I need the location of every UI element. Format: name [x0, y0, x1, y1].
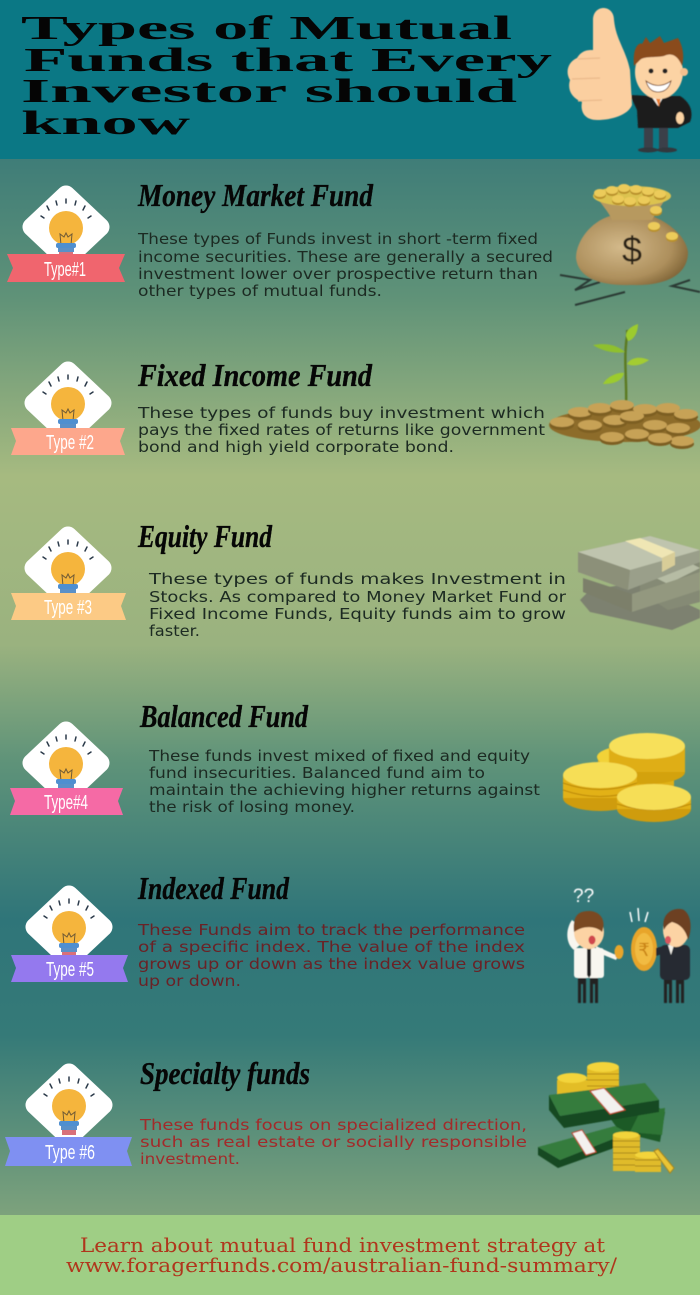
badge: Type #6 — [5, 1073, 132, 1166]
section: Fixed Income Fund — [11, 324, 700, 456]
icon: plant growing from coins — [549, 324, 700, 449]
body text: These types of Funds invest in short -term fixed — [137, 230, 538, 248]
heading: Specialty funds — [140, 1055, 310, 1091]
body text: These funds focus on specialized direction, — [139, 1116, 527, 1134]
body text: grows up or down as the index value grows — [138, 955, 525, 973]
section: Money Market Fund — [7, 177, 700, 305]
heading: Fixed Income Fund — [137, 357, 373, 393]
body text: fund insecurities. Balanced fund aim to — [149, 764, 485, 782]
header panel — [0, 0, 700, 159]
section: Equity Fund — [11, 518, 700, 640]
body text: faster. — [149, 622, 200, 640]
body text: up or down. — [138, 972, 241, 990]
icon: gold coin stacks — [563, 733, 691, 822]
icon: confused investors with coin: ?? — [573, 886, 594, 907]
badge: Type #3 — [11, 536, 126, 620]
icon: stacks of cash — [578, 536, 700, 630]
badge: Type#4 — [10, 731, 123, 815]
icon: money bag — [560, 184, 700, 305]
icon: cash bundles and coins — [538, 1062, 674, 1173]
icon: businessman thumbs up — [568, 8, 692, 152]
body text: These types of funds buy investment which — [137, 404, 545, 422]
icon: confused investors with coin: ₹ — [638, 940, 650, 961]
title: know — [21, 105, 191, 142]
footer panel — [0, 1215, 700, 1295]
heading: Equity Fund — [137, 518, 273, 554]
badge: Type #5 — [11, 895, 128, 982]
badge: Type #3: Type #3 — [44, 597, 92, 619]
body text: These types of funds makes Investment in — [148, 570, 566, 588]
body text: These Funds aim to track the performance — [137, 921, 525, 939]
body text — [139, 1116, 527, 1168]
footer call to action — [66, 1233, 617, 1277]
heading: Balanced Fund — [139, 698, 309, 734]
badge: Type#1: Type#1 — [44, 259, 86, 281]
body text: other types of mutual funds. — [138, 282, 382, 300]
title — [21, 10, 552, 142]
badge: Type#1 — [7, 195, 125, 282]
body text: Stocks. As compared to Money Market Fund or — [149, 588, 567, 606]
body text: such as real estate or socially responsible — [140, 1133, 527, 1151]
body text: bond and high yield corporate bond. — [138, 438, 454, 456]
badge: Type #5: Type #5 — [46, 959, 94, 981]
section: Balanced Fund — [10, 698, 691, 822]
body text — [137, 921, 525, 990]
body text: maintain the achieving higher returns against — [149, 781, 540, 799]
body text — [148, 747, 540, 816]
footer call to action: www.foragerfunds.com/australian-fund-summary/ — [66, 1253, 617, 1277]
icon: money bag: $ — [622, 229, 642, 270]
badge: Type #6: Type #6 — [45, 1142, 95, 1164]
heading: Money Market Fund — [137, 177, 374, 213]
body text: These funds invest mixed of fixed and equity — [148, 747, 530, 765]
title: Funds that Every — [24, 42, 552, 79]
body text — [137, 404, 545, 456]
title: Types of Mutual — [21, 10, 512, 47]
body text — [137, 230, 553, 300]
badge: Type #2 — [11, 371, 125, 455]
body text: of a specific index. The value of the index — [138, 938, 525, 956]
section: Indexed Fund — [11, 870, 691, 1003]
section: Specialty funds — [5, 1055, 674, 1173]
body text: income securities. These are generally a secured — [138, 248, 553, 266]
heading: Indexed Fund — [137, 870, 290, 906]
body text: the risk of losing money. — [149, 798, 355, 816]
footer call to action: Learn about mutual fund investment strategy at — [80, 1233, 605, 1257]
body text: investment lower over prospective return than — [138, 265, 538, 283]
body text: Fixed Income Funds, Equity funds aim to grow — [149, 605, 566, 623]
badge: Type#4: Type#4 — [44, 792, 88, 814]
body text — [148, 570, 567, 640]
title: Investor should — [21, 73, 517, 110]
body text: pays the fixed rates of returns like government — [138, 421, 545, 439]
badge: Type #2: Type #2 — [46, 432, 94, 454]
body text: investment. — [140, 1150, 240, 1168]
icon: confused investors with coin — [567, 886, 691, 1003]
